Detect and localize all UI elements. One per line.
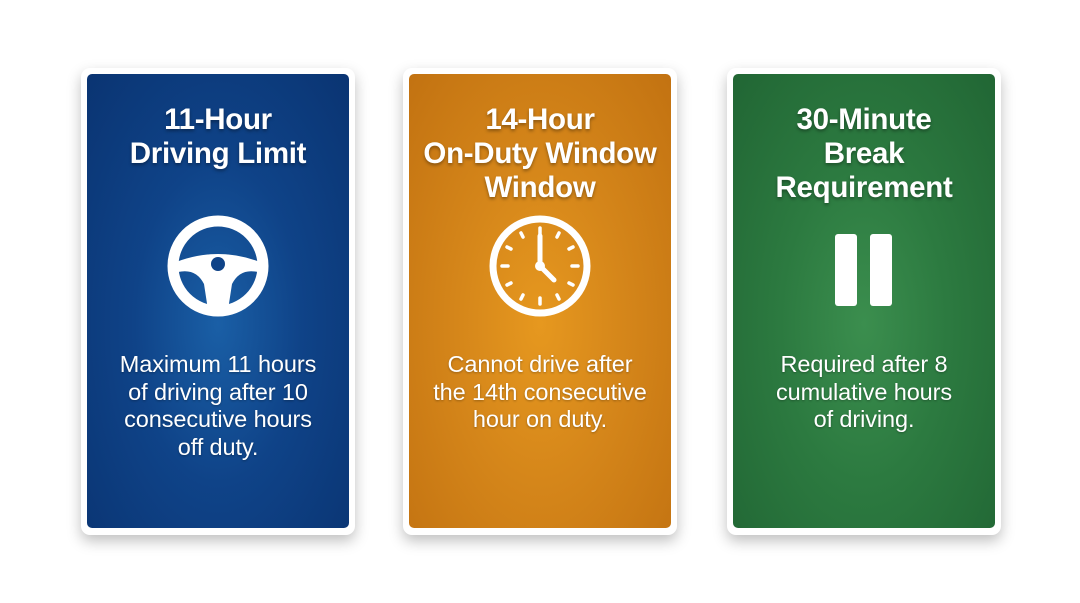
- heading: 30-Minute: [796, 103, 931, 136]
- text block: cumulative hours: [776, 378, 952, 404]
- heading: [130, 103, 307, 172]
- text block: hour on duty.: [473, 406, 607, 432]
- heading: [423, 103, 658, 204]
- icon: pause: [835, 234, 892, 306]
- heading: Driving Limit: [130, 137, 306, 170]
- text block: off duty.: [178, 434, 258, 460]
- heading: On-Duty Window: [423, 137, 657, 170]
- text block: of driving.: [814, 406, 914, 432]
- heading: Requirement: [775, 171, 952, 204]
- heading: Break: [824, 137, 904, 170]
- panel: 11-hour driving limit: [81, 68, 355, 535]
- text block: [120, 351, 316, 462]
- text block: [776, 351, 952, 434]
- text block: Cannot drive after: [448, 351, 632, 377]
- panel: 30-minute break: [727, 68, 1001, 535]
- text block: Maximum 11 hours: [120, 351, 316, 377]
- text block: Required after 8: [781, 351, 947, 377]
- text block: the 14th consecutive: [433, 378, 647, 404]
- text block: [433, 351, 647, 434]
- icon: clock: [490, 216, 590, 316]
- panel: 14-hour on-duty window: [403, 68, 677, 535]
- heading: Window: [484, 171, 596, 204]
- heading: [775, 103, 953, 206]
- heading: 11-Hour: [164, 103, 272, 136]
- text block: consecutive hours: [124, 406, 312, 432]
- text block: of driving after 10: [128, 378, 308, 404]
- heading: 14-Hour: [485, 103, 595, 136]
- icon: steering wheel: [168, 216, 268, 316]
